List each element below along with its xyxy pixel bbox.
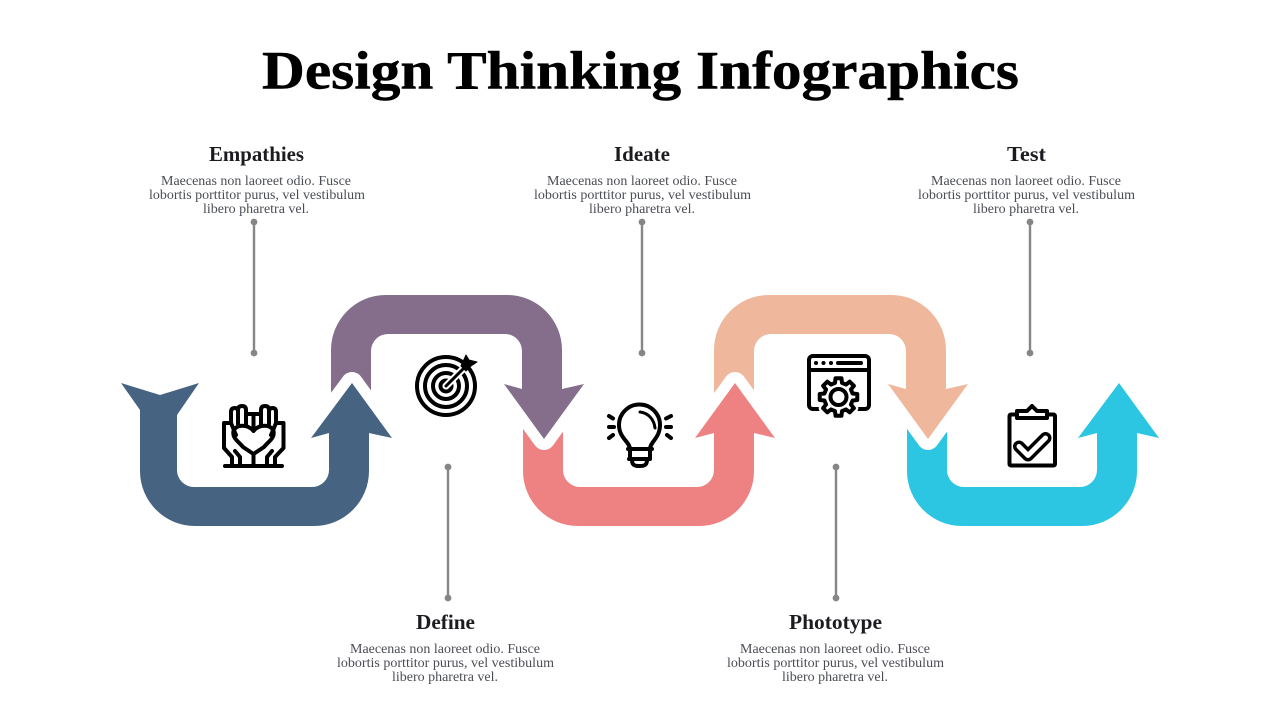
text block: phototype: Phototype	[789, 610, 882, 634]
text block: phototype: lobortis porttitor purus, vel vestibulum	[727, 655, 944, 670]
text block: empathies: Empathies	[209, 142, 304, 166]
text block: test: libero pharetra vel.	[973, 201, 1079, 216]
text block: test: lobortis porttitor purus, vel vestibulum	[918, 187, 1135, 202]
leader line: empathies	[252, 220, 256, 355]
leader line: define	[446, 465, 450, 600]
text block: define: libero pharetra vel.	[392, 669, 498, 684]
arrow: phototype (peach)	[714, 295, 968, 439]
arrow: ideate (pink)	[523, 383, 775, 526]
text block: phototype: Maecenas non laoreet odio. Fusce	[740, 641, 930, 656]
arrow: empathies (blue)	[121, 383, 392, 526]
text block: ideate: Maecenas non laoreet odio. Fusce	[547, 173, 737, 188]
leader line: phototype	[834, 465, 838, 600]
icon: clipboard with check	[1010, 406, 1055, 466]
text block: ideate: lobortis porttitor purus, vel vestibulum	[534, 187, 751, 202]
text block: define: Maecenas non laoreet odio. Fusce	[350, 641, 540, 656]
text block: phototype: libero pharetra vel.	[782, 669, 888, 684]
text block: test: Maecenas non laoreet odio. Fusce	[931, 173, 1121, 188]
icon: light bulb	[609, 404, 671, 466]
icon: hands holding heart	[224, 406, 284, 466]
text block: ideate: Ideate	[614, 142, 670, 166]
leader line: ideate	[640, 220, 644, 355]
text block: define	[337, 610, 554, 684]
text block: test	[918, 142, 1135, 216]
text block: define: Define	[416, 610, 475, 634]
text block: define: lobortis porttitor purus, vel vestibulum	[337, 655, 554, 670]
text block: phototype	[727, 610, 944, 684]
text block: empathies	[149, 142, 365, 216]
text block: test: Test	[1007, 142, 1046, 166]
icon: target with dart	[417, 355, 477, 415]
leader line: test	[1028, 220, 1032, 355]
arrow: define (purple)	[331, 295, 584, 439]
text block: ideate: libero pharetra vel.	[589, 201, 695, 216]
arrow: test (cyan)	[907, 383, 1159, 526]
text block: empathies: lobortis porttitor purus, vel vestibulum	[149, 187, 365, 202]
text block: empathies: Maecenas non laoreet odio. Fusce	[161, 173, 351, 188]
icon: browser window with gear	[809, 356, 869, 416]
text block: ideate	[534, 142, 751, 216]
title: Design Thinking Infographics	[262, 40, 1019, 100]
text block: empathies: libero pharetra vel.	[203, 201, 309, 216]
